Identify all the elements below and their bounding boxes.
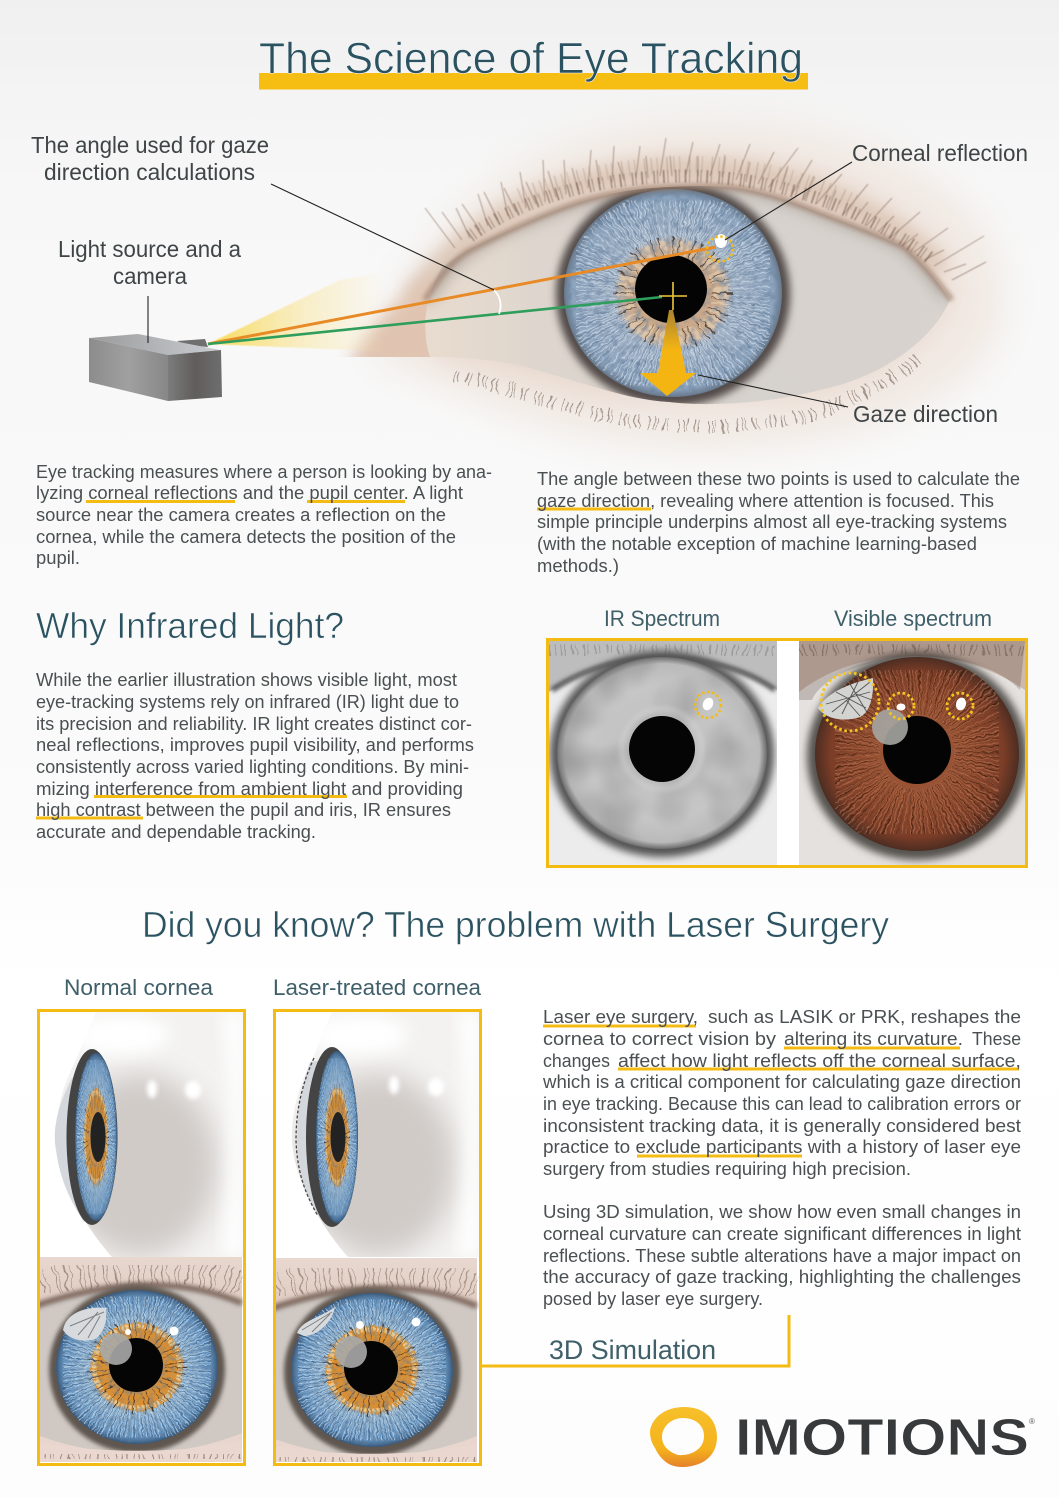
leader lines bbox=[148, 162, 852, 407]
text block: laser surgery: Laser eye surgery, bbox=[543, 1006, 698, 1027]
label: angle: direction calculations bbox=[44, 159, 255, 185]
icon: corneal reflection marker bbox=[707, 234, 733, 262]
label: gaze direction: Gaze direction bbox=[853, 401, 998, 427]
sclera bbox=[425, 186, 950, 404]
text block: infrared explanation: consistently across varied lighting conditions. By mini- bbox=[36, 756, 469, 777]
panel: normal cornea bbox=[32, 1010, 244, 1465]
visible-light eye photo bbox=[799, 641, 1027, 865]
text block: laser surgery: surgery from studies requiring high precision. bbox=[543, 1158, 911, 1179]
text block: laser surgery: corneal curvature can create significant differences in light bbox=[543, 1223, 1021, 1244]
heading: why infrared: Why Infrared Light? bbox=[36, 605, 344, 646]
text block: laser surgery: cornea to correct vision by bbox=[543, 1028, 777, 1049]
orange ray to corneal reflection bbox=[208, 247, 716, 344]
label: laser-treated cornea: Laser-treated cornea bbox=[273, 975, 482, 1000]
label: IR spectrum: IR Spectrum bbox=[604, 606, 720, 631]
label: light source: camera bbox=[113, 263, 187, 289]
cornea bulge bbox=[55, 1060, 90, 1222]
label: corneal reflection: Corneal reflection bbox=[852, 140, 1028, 166]
flattened cornea bbox=[297, 1060, 322, 1215]
frontal eye view bbox=[32, 1255, 242, 1465]
text block: gaze direction explanation: (with the notable exception of machine learning-based bbox=[537, 533, 977, 554]
label: angle: The angle used for gaze bbox=[31, 132, 269, 158]
heading: did you know: Did you know? The problem with Laser Surgery bbox=[142, 904, 889, 945]
text block: gaze direction explanation: The angle between these two points is used to calculate the bbox=[537, 468, 1020, 489]
text block: laser surgery: practice to exclude participants with a history of laser eye bbox=[543, 1136, 1021, 1157]
panel: spectrum comparison bbox=[548, 640, 1027, 866]
inner corner bbox=[344, 288, 430, 357]
text block: laser surgery: inconsistent tracking data, it is generally considered best bbox=[543, 1115, 1021, 1136]
text block: eye tracking intro: pupil. bbox=[36, 547, 80, 568]
text block: laser surgery: posed by laser eye surgery. bbox=[543, 1288, 763, 1309]
pupil center cross bbox=[659, 282, 687, 310]
logo: iMotions bbox=[650, 1407, 1035, 1467]
text block: laser surgery bbox=[542, 1006, 1021, 1309]
text block: infrared explanation bbox=[36, 669, 474, 842]
illustration: eye with gaze tracking geometry bbox=[345, 121, 1003, 450]
light beam bbox=[208, 270, 400, 353]
logo: iMotions: IMOTIONS bbox=[735, 1409, 1029, 1467]
text block: laser surgery: such as LASIK or PRK, reshapes the bbox=[708, 1006, 1021, 1027]
text block: laser surgery: Using 3D simulation, we show how even small changes in bbox=[543, 1201, 1021, 1222]
logo: iMotions: ® bbox=[1029, 1417, 1035, 1426]
side view eyeball bbox=[286, 1012, 480, 1257]
panel: laser-treated cornea bbox=[267, 1010, 480, 1468]
callout: 3D simulation bbox=[482, 1315, 789, 1366]
text block: laser surgery: altering its curvature. bbox=[784, 1028, 963, 1049]
iris bbox=[564, 189, 782, 397]
text block: gaze direction explanation: methods.) bbox=[537, 555, 619, 576]
label: light source: Light source and a bbox=[58, 236, 241, 262]
label: visible spectrum: Visible spectrum bbox=[834, 606, 992, 631]
frontal eye view bbox=[267, 1258, 477, 1468]
text block: infrared explanation: eye-tracking systems rely on infrared (IR) light due to bbox=[36, 691, 459, 712]
white divider gap bbox=[777, 641, 799, 865]
text block: laser surgery: reflections. These subtle alterations have a major impact on bbox=[543, 1245, 1021, 1266]
label: light source bbox=[58, 236, 241, 289]
text block: gaze direction explanation bbox=[537, 468, 1020, 576]
text block: laser surgery: which is a critical component for calculating gaze direction bbox=[542, 1071, 1021, 1092]
upper lid line bbox=[425, 186, 952, 300]
text block: eye tracking intro: source near the camera creates a reflection on the bbox=[36, 504, 446, 525]
text block: eye tracking intro: lyzing corneal reflections and the pupil center. A light bbox=[36, 482, 463, 503]
angle arc bbox=[494, 290, 501, 314]
text block: infrared explanation: its precision and reliability. IR light creates distinct cor- bbox=[36, 713, 472, 734]
title: The Science of Eye Tracking bbox=[259, 34, 803, 83]
lid band bbox=[412, 170, 940, 300]
text block: laser surgery: These bbox=[972, 1028, 1021, 1049]
pupil bbox=[635, 255, 707, 323]
callout: 3D simulation: 3D Simulation bbox=[549, 1335, 716, 1365]
text block: eye tracking intro: cornea, while the camera detects the position of the bbox=[36, 526, 456, 547]
text block: infrared explanation: high contrast between the pupil and iris, IR ensures bbox=[36, 799, 451, 820]
side view eyeball bbox=[50, 1012, 244, 1257]
text block: gaze direction explanation: simple principle underpins almost all eye-tracking systems bbox=[537, 511, 1007, 532]
green ray to pupil center bbox=[208, 297, 662, 344]
text block: infrared explanation: While the earlier illustration shows visible light, most bbox=[36, 669, 457, 690]
text block: infrared explanation: neal reflections, improves pupil visibility, and performs bbox=[36, 734, 474, 755]
arrow: gaze direction bbox=[640, 310, 696, 396]
label: angle bbox=[31, 132, 269, 185]
iris side view bbox=[66, 1049, 118, 1225]
text block: laser surgery: changes bbox=[543, 1050, 610, 1071]
iris side view bbox=[306, 1047, 358, 1227]
text block: gaze direction explanation: gaze direction, revealing where attention is focused. This bbox=[537, 490, 994, 511]
lower eyelashes bbox=[455, 355, 925, 426]
dashed corneal outline bbox=[296, 1058, 318, 1216]
text block: laser surgery: in eye tracking. Because this can lead to calibration errors or bbox=[543, 1093, 1021, 1114]
text block: infrared explanation: mizing interference from ambient light and providing bbox=[36, 778, 463, 799]
text block: eye tracking intro bbox=[36, 461, 492, 568]
text block: infrared explanation: accurate and dependable tracking. bbox=[36, 821, 316, 842]
IR eye photo bbox=[549, 641, 777, 865]
label: normal cornea: Normal cornea bbox=[64, 975, 214, 1000]
text block: laser surgery: the accuracy of gaze tracking, highlighting the challenges bbox=[543, 1266, 1021, 1287]
eyelid skin bbox=[375, 121, 1003, 450]
text block: laser surgery: affect how light reflects off the corneal surface, bbox=[618, 1050, 1021, 1071]
text block: eye tracking intro: Eye tracking measures where a person is looking by ana- bbox=[36, 461, 492, 482]
icon: camera and light source bbox=[89, 334, 222, 401]
upper eyelashes bbox=[425, 138, 986, 280]
